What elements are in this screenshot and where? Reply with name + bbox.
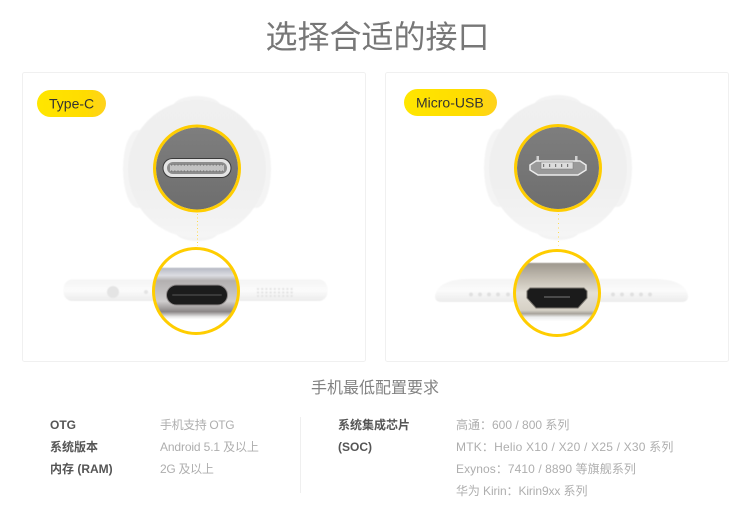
spec label: OTG: OTG [50,418,76,432]
illustration panels [22,72,729,362]
section heading: 手机最低配置要求 [311,380,439,397]
highlight circle: Type-C port on phone [150,248,242,334]
badge: Type-C [37,90,106,117]
panel: Micro-USB [386,72,728,362]
connector ball [484,95,632,240]
phone bottom edge [435,279,688,302]
dotted connector line [196,214,198,246]
highlight circle: Micro-USB port on phone [510,250,604,336]
badge: Micro-USB [404,89,497,116]
spec value: Exynos: Exynos：7410 / 8890 等旗舰系列 [456,462,636,476]
spec label: SoC: 系统集成芯片 [338,418,410,432]
connector ball [123,96,271,241]
spec table: SoC column [338,418,674,498]
spec value: MTK: MTK：Helio X10 / X20 / X25 / X30 系列 [456,440,674,454]
spec value: Qualcomm: 高通：600 / 800 系列 [456,418,569,432]
spec label: system version: 系统版本 [50,440,98,454]
spec value: RAM: 2G 及以上 [160,462,214,476]
spec table: left column [50,418,259,476]
panel frame [22,72,366,362]
badge: Type-C: Type-C [49,96,94,112]
panel: Type-C [22,72,366,362]
spec value: OTG: 手机支持 OTG [160,418,234,432]
panel frame [386,72,728,362]
spec value: system version: Android 5.1 及以上 [160,440,259,454]
highlight circle: Micro-USB port front [516,126,600,210]
title: 选择合适的接口 [265,19,490,55]
spec label: RAM: 内存 (RAM) [50,462,113,476]
spec label: SoC [338,418,410,454]
spec label: SoC: (SOC) [338,440,372,454]
highlight circle: Type-C port front [154,126,240,211]
dotted connector line [558,214,560,246]
phone bottom edge [64,280,328,301]
spec value: Kirin: 华为 Kirin：Kirin9xx 系列 [456,484,587,498]
badge: Micro-USB: Micro-USB [416,94,484,110]
